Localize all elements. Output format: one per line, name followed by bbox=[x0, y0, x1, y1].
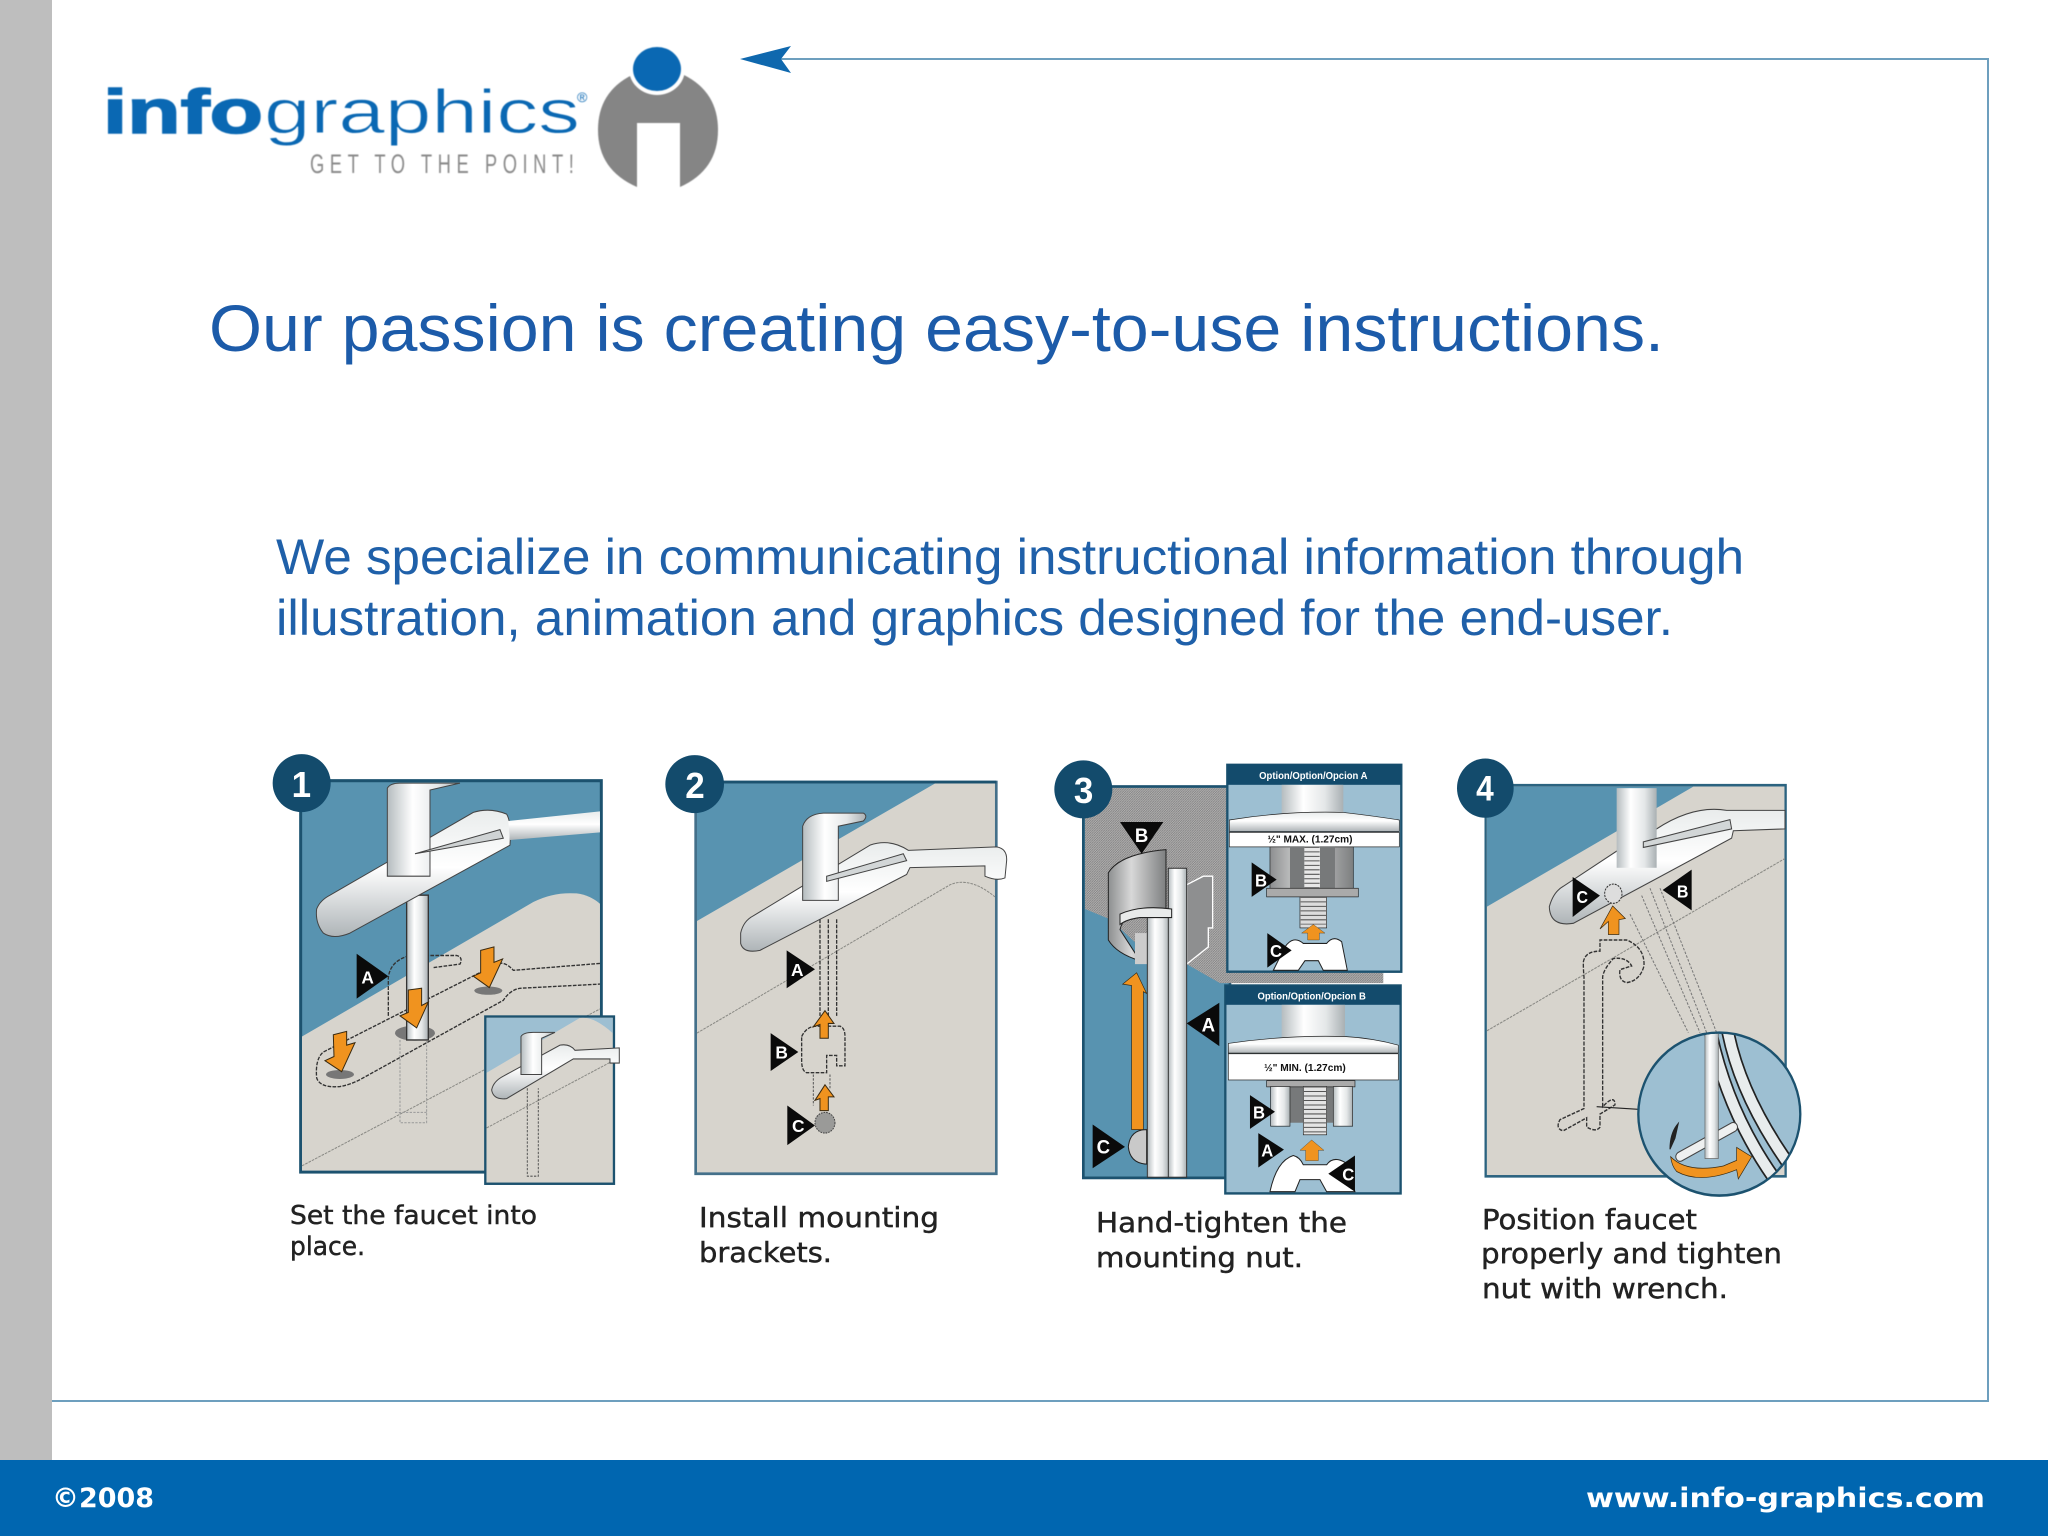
markers bbox=[1093, 822, 1219, 1168]
logo tagline: GET TO THE POINT! bbox=[310, 148, 574, 179]
inset: option B: ½" MIN. (1.27cm) bbox=[1264, 1063, 1346, 1074]
markers A B C bbox=[771, 950, 815, 1145]
step 3 arrow bbox=[1123, 973, 1147, 1130]
logo bbox=[103, 43, 718, 187]
step 3 caption: Hand-tighten the bbox=[1096, 1206, 1347, 1239]
step 1 inset bbox=[485, 1017, 619, 1184]
step 2 bracket bbox=[802, 1026, 845, 1133]
inset: option B: C bbox=[1342, 1165, 1354, 1185]
step 2 number badge bbox=[665, 755, 724, 813]
logo wordmark: graphics: graphics bbox=[264, 78, 580, 147]
inset: option A: B bbox=[1255, 871, 1267, 891]
step 1 number badge: 1 bbox=[292, 764, 311, 805]
step 3 caption: mounting nut. bbox=[1096, 1241, 1303, 1274]
inset: option B: A bbox=[1261, 1141, 1273, 1161]
step 3 pipe bbox=[1120, 868, 1187, 1177]
step 4 number badge bbox=[1457, 759, 1514, 818]
step 4 wall bbox=[1487, 787, 1693, 907]
step 3 caption bbox=[1096, 1206, 1347, 1274]
website: www.info-graphics.com bbox=[1586, 1483, 1985, 1514]
step 4 number badge: 4 bbox=[1476, 770, 1494, 809]
logo wordmark: info: info bbox=[103, 78, 263, 147]
step 4 caption: properly and tighten bbox=[1481, 1237, 1782, 1270]
title: Our passion is creating easy-to-use instructions. bbox=[209, 291, 1664, 365]
panel: step 1 bbox=[273, 754, 619, 1184]
markers: B bbox=[1135, 826, 1148, 847]
step 1 counter bbox=[302, 893, 600, 1171]
wing nut bbox=[1128, 1130, 1147, 1164]
step 1 pipes bbox=[407, 895, 428, 1040]
panel: step 2 bbox=[665, 755, 1007, 1174]
marker A bbox=[357, 954, 388, 999]
wrench bbox=[1558, 940, 1644, 1131]
markers: C bbox=[1577, 887, 1588, 907]
panel: step 4 bbox=[1457, 759, 1800, 1196]
bracket side bbox=[1187, 876, 1213, 964]
registered mark: ® bbox=[577, 89, 588, 105]
step 2 caption: brackets. bbox=[699, 1236, 832, 1269]
step 1 caption: place. bbox=[290, 1232, 365, 1262]
panel: step 3 bbox=[1054, 760, 1401, 1193]
intro text: We specialize in communicating instructional information through bbox=[276, 529, 1744, 585]
step 4 faucet bbox=[1549, 788, 1785, 924]
inset: option A: ½" MAX. (1.27cm) bbox=[1267, 835, 1352, 846]
logo icon: person bbox=[598, 43, 718, 187]
intro text bbox=[276, 529, 1744, 646]
step 1 caption: Set the faucet into bbox=[290, 1201, 537, 1231]
step 1 faucet bbox=[316, 783, 600, 937]
rotation arrow bbox=[1671, 1147, 1752, 1179]
markers: C bbox=[1097, 1137, 1110, 1159]
nut cylinder bbox=[1108, 850, 1166, 961]
left grey bar bbox=[0, 0, 52, 1460]
inset: option B: B bbox=[1253, 1103, 1265, 1123]
footer bar bbox=[0, 1460, 2048, 1536]
markers A B C: C bbox=[792, 1116, 805, 1136]
inset: option B bbox=[1225, 985, 1401, 1193]
step 2 wall bbox=[697, 783, 935, 921]
step 2 number badge: 2 bbox=[685, 765, 705, 806]
step 3 hatched area bbox=[1085, 788, 1383, 983]
step 2 background bbox=[696, 782, 996, 1174]
step 1 background bbox=[301, 781, 601, 1172]
step 1 caption bbox=[290, 1201, 537, 1262]
markers A B C: B bbox=[775, 1042, 788, 1063]
step 1 arrows bbox=[325, 947, 503, 1072]
step 4 arrow bbox=[1600, 906, 1625, 934]
markers bbox=[1573, 870, 1692, 917]
marker A: A bbox=[361, 967, 374, 987]
intro text: illustration, animation and graphics designed for the end-user. bbox=[276, 590, 1673, 646]
step 3 background bbox=[1083, 787, 1230, 1178]
markers A B C: A bbox=[791, 960, 804, 980]
step 4 caption: Position faucet bbox=[1482, 1203, 1697, 1236]
inset: option B: Option/Option/Opcion B bbox=[1257, 991, 1366, 1002]
inset: option A bbox=[1227, 764, 1401, 972]
step 2 arrows bbox=[813, 1011, 834, 1111]
markers: B bbox=[1677, 882, 1688, 902]
step 4 background bbox=[1486, 785, 1786, 1176]
step 2 caption: Install mounting bbox=[699, 1201, 939, 1234]
step 3 number badge bbox=[1054, 760, 1112, 818]
step 3 number badge: 3 bbox=[1074, 771, 1093, 811]
markers: A bbox=[1202, 1015, 1215, 1036]
step 2 caption bbox=[699, 1201, 939, 1269]
step 1 number badge bbox=[273, 754, 331, 812]
inset: option A: Option/Option/Opcion A bbox=[1259, 771, 1368, 782]
step 2 faucet bbox=[741, 813, 1007, 951]
step 4 caption bbox=[1481, 1203, 1782, 1305]
inset: option A: C bbox=[1270, 942, 1282, 961]
step 4 caption: nut with wrench. bbox=[1482, 1272, 1728, 1305]
copyright: ©2008 bbox=[52, 1483, 154, 1514]
detail circle bbox=[1638, 1029, 1800, 1196]
